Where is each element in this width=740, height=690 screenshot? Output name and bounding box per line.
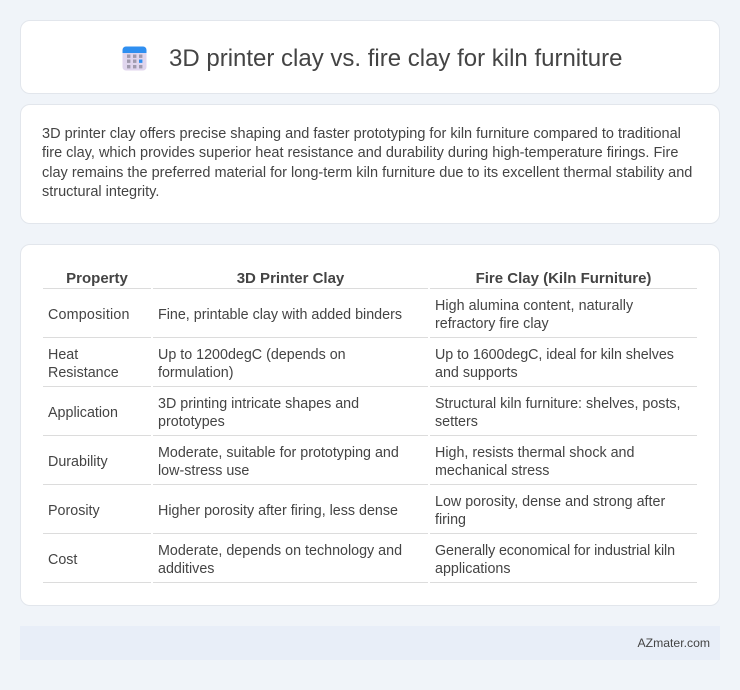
- text: firing: [435, 512, 466, 528]
- text: Structural kiln furniture: shelves, posts,: [435, 396, 681, 412]
- intro card: [20, 104, 720, 224]
- text: Resistance: [48, 365, 119, 381]
- icon: calendar: [122, 46, 146, 70]
- text: Fine, printable clay with added binders: [158, 307, 402, 323]
- text: Composition: [48, 307, 130, 323]
- text: and supports: [435, 365, 518, 381]
- row: composition: [48, 298, 634, 332]
- text: Moderate, depends on technology and: [158, 543, 402, 559]
- text: Fire Clay (Kiln Furniture): [476, 270, 651, 287]
- text: Durability: [48, 454, 108, 470]
- intro text: [42, 126, 692, 200]
- text: 3D Printer Clay: [237, 270, 344, 287]
- text: Up to 1600degC, ideal for kiln shelves: [435, 347, 674, 363]
- header row: [66, 270, 651, 287]
- row: application: [48, 396, 681, 430]
- footer text: AZmater.com: [638, 636, 710, 650]
- text: High, resists thermal shock and: [435, 445, 634, 461]
- text: structural integrity.: [42, 184, 159, 200]
- text: refractory fire clay: [435, 316, 549, 332]
- text: Porosity: [48, 503, 100, 519]
- text: 3D printing intricate shapes and: [158, 396, 359, 412]
- text: prototypes: [158, 414, 225, 430]
- text: Higher porosity after firing, less dense: [158, 503, 398, 519]
- text: Generally economical for industrial kiln: [435, 543, 675, 559]
- title card: [20, 20, 720, 94]
- row: cost: [48, 543, 675, 577]
- text: low-stress use: [158, 463, 249, 479]
- text: 3D printer clay offers precise shaping and faster prototyping for kiln furniture compared to traditional: [42, 126, 681, 142]
- text: clay remains the preferred material for long-term kiln furniture due to its excellent thermal stability and: [42, 165, 692, 181]
- text: High alumina content, naturally: [435, 298, 633, 314]
- title: 3D printer clay vs. fire clay for kiln furniture: [169, 45, 622, 72]
- row: durability: [48, 445, 634, 479]
- text: Property: [66, 270, 128, 287]
- text: mechanical stress: [435, 463, 549, 479]
- text: Moderate, suitable for prototyping and: [158, 445, 399, 461]
- text: applications: [435, 561, 511, 577]
- row: heat resistance: [48, 347, 674, 381]
- text: Application: [48, 405, 118, 421]
- text: Cost: [48, 552, 77, 568]
- footer bar: [20, 626, 720, 660]
- text: Up to 1200degC (depends on: [158, 347, 346, 363]
- text: Low porosity, dense and strong after: [435, 494, 665, 510]
- row: porosity: [48, 494, 666, 528]
- text: setters: [435, 414, 478, 430]
- table card: [20, 244, 720, 606]
- table: [43, 270, 697, 583]
- text: additives: [158, 561, 214, 577]
- text: fire clay, which provides superior heat resistance and durability during high-temperature firings. Fire: [42, 145, 678, 161]
- text: formulation): [158, 365, 234, 381]
- text: Heat: [48, 347, 78, 363]
